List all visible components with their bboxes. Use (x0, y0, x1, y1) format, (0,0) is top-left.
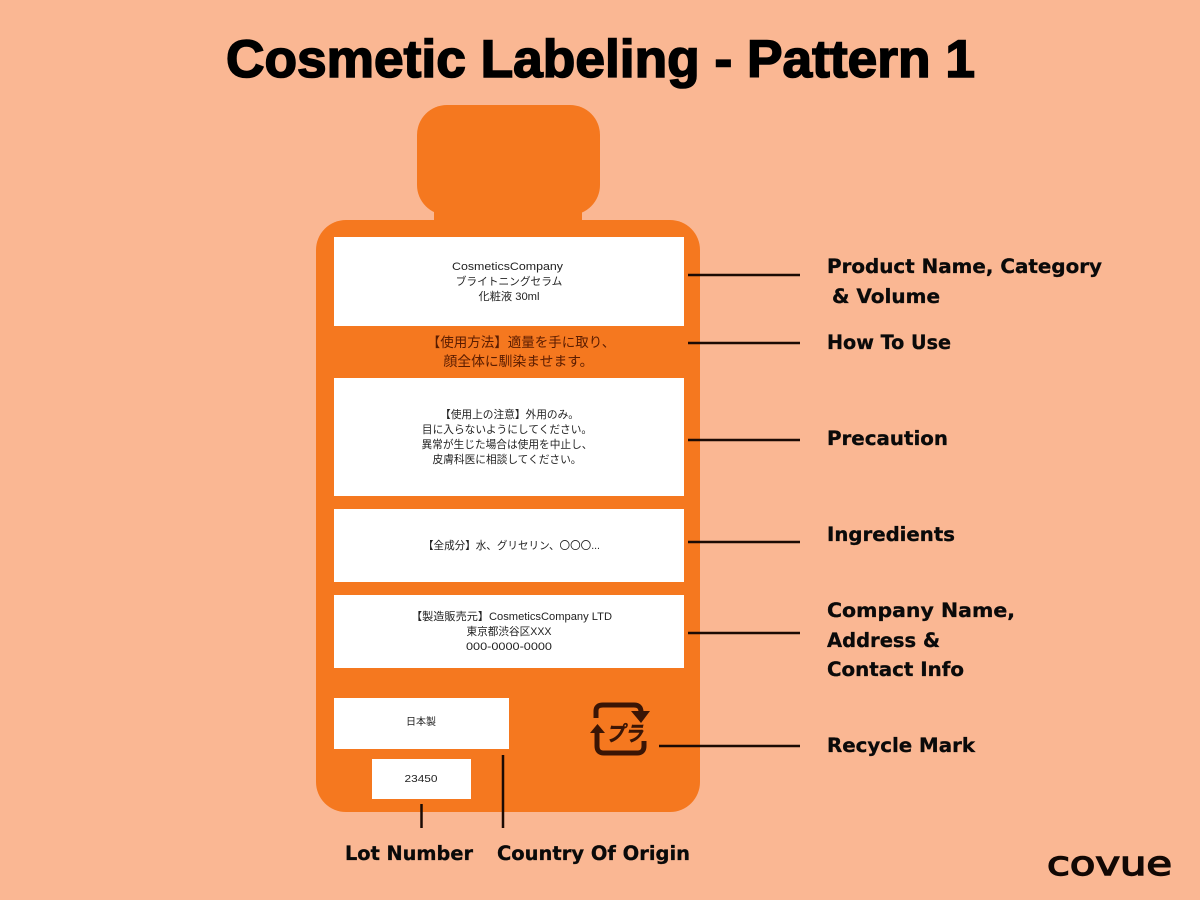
label: product name: 化粧液 30ml (478, 290, 540, 303)
label: lot number (372, 759, 471, 799)
label: ingredients: 【全成分】水、グリセリン、〇〇〇... (423, 539, 600, 552)
label: lot number: 23450 (404, 773, 438, 785)
icon: recycle mark: プラ (606, 723, 644, 746)
bottle illustration (316, 105, 700, 812)
label: precaution: 【使用上の注意】外用のみ。 (440, 408, 579, 421)
callout line: country of origin (502, 755, 504, 828)
label: country of origin: 日本製 (406, 715, 436, 728)
label: country of origin (334, 698, 509, 749)
label: company (334, 595, 684, 668)
callout line: product name (688, 274, 800, 276)
callout: company name, address and contact info: Contact Info (827, 658, 964, 681)
how to use text: 顔全体に馴染ませます。 (444, 354, 593, 369)
bottle cap (417, 105, 600, 215)
callout: recycle mark: Recycle Mark (827, 734, 976, 757)
callout: how to use: How To Use (827, 331, 951, 354)
callout: company name, address and contact info: Address & (827, 629, 940, 652)
callout: product name, category and volume (827, 255, 1102, 308)
label: precaution: 目に入らないようにしてください。 (422, 424, 592, 436)
callout: company name, address and contact info (827, 599, 1015, 681)
label: precaution: 皮膚科医に相談してください。 (433, 453, 581, 466)
callout line: precaution (688, 439, 800, 441)
label: company: 東京都渋谷区XXX (466, 625, 552, 638)
label: precaution (334, 378, 684, 496)
callout: precaution: Precaution (827, 427, 948, 450)
callout: ingredients: Ingredients (827, 523, 955, 546)
callout line: how to use (688, 342, 800, 344)
label: product name: ブライトニングセラム (456, 275, 562, 288)
label: ingredients (334, 509, 684, 582)
logo: covue: covue (1047, 844, 1172, 883)
callout: company name, address and contact info: Company Name, (827, 599, 1015, 622)
bottle neck (434, 200, 582, 225)
how to use text: 【使用方法】適量を手に取り、 (427, 334, 615, 350)
bottle body (316, 220, 700, 812)
callout line: company (688, 632, 800, 634)
label: product name (334, 237, 684, 326)
callout line: recycle mark (659, 745, 800, 747)
callout line: ingredients (688, 541, 800, 543)
callout: country of origin: Country Of Origin (497, 842, 690, 865)
callout: product name, category and volume: & Volume (832, 285, 940, 308)
title: Cosmetic Labeling - Pattern 1 (226, 30, 975, 89)
callout: product name, category and volume: Product Name, Category (827, 255, 1102, 278)
how to use text (427, 334, 615, 369)
callout line: lot number (420, 804, 423, 828)
label: company: 000-0000-0000 (466, 641, 552, 653)
callout: lot number: Lot Number (345, 842, 473, 865)
label: precaution: 異常が生じた場合は使用を中止し、 (421, 438, 593, 451)
label: company: 【製造販売元】CosmeticsCompany LTD (411, 610, 612, 623)
icon: recycle mark (590, 705, 650, 753)
label: product name: CosmeticsCompany (452, 261, 564, 273)
